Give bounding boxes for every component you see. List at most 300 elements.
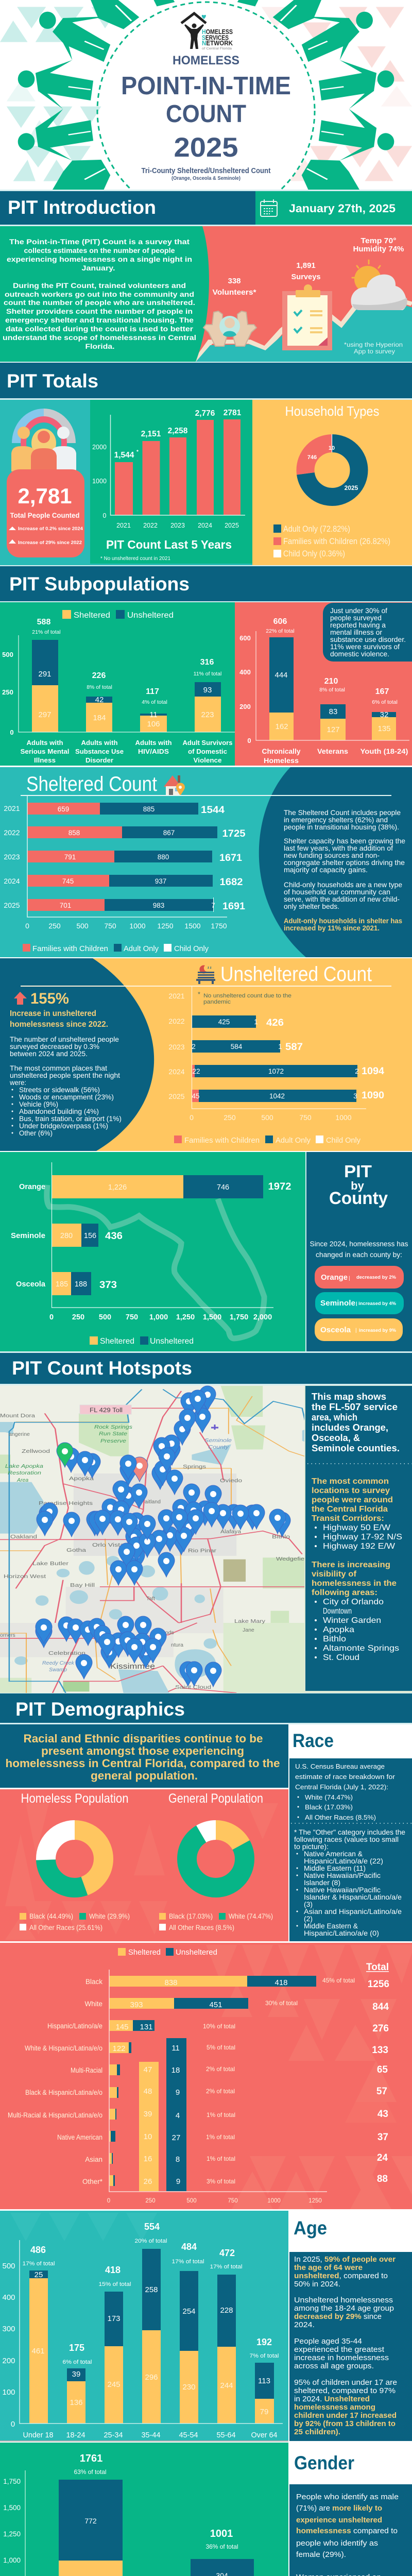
section bar: PIT Subpopulations (0, 565, 412, 601)
value labels: 418 (274, 1978, 288, 1987)
intro text (310, 1240, 408, 1259)
panel: age notes: In 2025, 59% of people over (294, 2255, 396, 2264)
map labels: Taft (146, 1596, 155, 1602)
stat: weather (353, 237, 404, 253)
axis labels: 500 (2, 651, 13, 658)
stacked bar chart: 250 (48, 922, 61, 930)
intro text: count the number of people who are unsheltered. (4, 298, 195, 307)
value labels: 280 (60, 1232, 73, 1240)
category labels: Hispanic/Latino/a/e (47, 2022, 102, 2030)
legend (118, 1948, 217, 1957)
card: total people: Total People Counted (10, 512, 79, 519)
unsheltered text: Vehicle (9%) (19, 1100, 58, 1108)
transit corridors: The most common (312, 1477, 389, 1486)
percent labels (32, 629, 221, 705)
value labels (38, 670, 214, 728)
axis labels: 2023 (170, 522, 185, 529)
value labels: 838 (164, 1978, 178, 1987)
stacked bar chart: 2023 (4, 853, 20, 861)
pill: Osceola (315, 1318, 403, 1341)
percent labels: 3% of total (207, 2178, 235, 2185)
legend (273, 524, 390, 558)
totals: 88 (377, 2174, 388, 2184)
title: (Orange, Osceola & Seminole) (171, 175, 241, 181)
value labels (31, 2270, 270, 2416)
florida outline (47, 1185, 264, 1338)
map labels: Gotha (66, 1547, 86, 1553)
unsheltered text: unsheltered people spent the night (10, 1071, 120, 1079)
intro text: Florida. (85, 342, 114, 350)
stacked bar chart: 983 (153, 902, 164, 909)
stacked bars (269, 637, 396, 719)
axis labels: 1250 (308, 2198, 322, 2204)
panel: age notes: 95% of children under 17 are (294, 2378, 397, 2387)
totals: 1256 (368, 1979, 389, 1990)
sheltered text: Child-only households are a new type (284, 880, 402, 889)
map labels: Rock Springs (94, 1424, 133, 1430)
transit corridors: Highway 17-92 N/S (323, 1533, 402, 1541)
category labels: Violence (194, 756, 221, 764)
axis labels: 0 (10, 728, 14, 736)
axis labels: 2000 (92, 444, 107, 451)
totals: 133 (372, 2045, 388, 2056)
legend (90, 1336, 194, 1346)
legend (62, 610, 174, 620)
axis labels: 1,500 (3, 2504, 21, 2512)
percent labels: 22% of total (266, 628, 295, 634)
section bar: PIT Count Hotspots: PIT Count Hotspots (12, 1358, 192, 1379)
percent labels: 17% of total (172, 2259, 204, 2265)
map labels: Restoration (8, 1470, 41, 1476)
legend (23, 944, 209, 953)
heading: Race: Race (293, 1730, 334, 1751)
category labels: Adult Survivors (182, 739, 233, 747)
axis labels: 1000 (92, 478, 107, 485)
section bar: PIT Introduction: PIT Introduction (8, 197, 156, 218)
value labels: 42 (95, 696, 104, 704)
donut: general population (187, 1830, 245, 1888)
stacked bar chart: 750 (104, 922, 116, 930)
logo: SERVICES (202, 34, 229, 41)
map labels: FL 429 Toll (90, 1408, 123, 1414)
heading: Age: Age (294, 2217, 327, 2239)
totals: 844 (372, 2002, 389, 2012)
stacked bar chart: 1000 (335, 1113, 352, 1122)
title: HOMELESS (173, 54, 239, 67)
unsheltered text: surveyed decreased by 0.3% (10, 1042, 99, 1050)
155% stat (10, 990, 108, 1029)
transit corridors: the Central Florida (312, 1505, 388, 1514)
legend: Sheltered (128, 1948, 161, 1957)
axis labels: 250 (145, 2198, 156, 2204)
axis labels: 1,250 (3, 2530, 21, 2538)
value labels: 254 (182, 2307, 196, 2316)
pin: green (57, 1443, 73, 1467)
percent labels: 1% of total (207, 2155, 235, 2162)
stat: weather: Temp 70° (360, 237, 397, 245)
sheltered text: new funding sources and non- (284, 851, 380, 859)
value labels: 127 (327, 725, 340, 734)
legend: general: White (74.47%) (229, 1912, 273, 1920)
total heading: Total (366, 1962, 389, 1973)
bar labels: * (136, 449, 139, 455)
section bar: PIT Totals (0, 363, 412, 398)
axis labels: 1,000 (3, 2556, 21, 2564)
stat: volunteers: Volunteers* (212, 288, 256, 297)
panel: PIT by county summary (305, 1152, 412, 1351)
value labels: 156 (84, 1232, 96, 1240)
intro text: January. (81, 264, 115, 272)
stacked bar chart: 2021 (4, 804, 20, 812)
stacked bar chart: 1000 (129, 922, 146, 930)
totals: 226 (92, 671, 106, 680)
visibility areas: Apopka (323, 1625, 354, 1634)
stacked bar chart: 1725 (222, 828, 246, 839)
percent labels: 17% of total (23, 2261, 55, 2267)
category labels: Adults with (27, 739, 63, 747)
map labels: Run State (99, 1431, 127, 1437)
category labels: Other* (82, 2178, 103, 2185)
percent labels: 5% of total (207, 2044, 235, 2051)
map labels: Zellwood (22, 1448, 50, 1454)
intro text: The Point-in-Time (PIT) Count is a survey that (9, 238, 190, 246)
donut: homeless population (46, 1830, 104, 1888)
callout: Just under 30% of (330, 606, 387, 615)
category labels: White (84, 2000, 102, 2008)
pill: Orange: decreased by 2% (356, 1275, 397, 1280)
logo: NETWORK (202, 40, 233, 47)
legend: Adult Only (72.82%) (283, 524, 350, 534)
intro text: During the PIT Count, trained volunteers and (13, 281, 186, 290)
icon: calendar (261, 199, 277, 216)
map labels: Oviedo (220, 1478, 242, 1484)
county labels: Orange (19, 1183, 45, 1191)
stacked bar chart: 2022 (4, 828, 20, 837)
stacked bar chart: 584 (231, 1043, 243, 1050)
stacked bar chart: 745 (62, 877, 74, 885)
category labels: Asian (85, 2156, 102, 2163)
footnote: *using the Hyperion (344, 342, 403, 348)
visibility areas: homelessness in the (312, 1579, 397, 1588)
lead text: Seminole counties. (312, 1443, 400, 1453)
logo (181, 13, 233, 50)
people circle: right half (237, 0, 394, 190)
category labels: White & Hispanic/Latina/e/o (25, 2044, 102, 2052)
panel: race notes: Hispanic/Latino/a/e (0) (304, 1929, 379, 1937)
map: FL-507 hotspots (0, 1385, 307, 1693)
axis labels: 2,000 (253, 1313, 272, 1321)
value labels: 79 (260, 2408, 268, 2416)
background triangles: teal (0, 7, 119, 181)
axis labels: 200 (239, 703, 251, 710)
panel: race notes: * The "Other" category includes the (294, 1828, 405, 1836)
unsheltered text: Other (6%) (19, 1129, 53, 1137)
card: total people: Increase of 29% since 2022 (18, 540, 82, 546)
panel: gender notes: homelessness compared to (296, 2527, 398, 2535)
intro text (3, 238, 196, 350)
map labels: Reedy Creek (42, 1660, 75, 1666)
bar labels (114, 409, 242, 460)
pill: Osceola: Osceola (320, 1326, 351, 1334)
value labels: 244 (220, 2381, 233, 2390)
unsheltered text: Streets or sidewalk (56%) (19, 1086, 100, 1094)
totals: 1001 (210, 2528, 233, 2539)
panel: gender notes: (71%) are more likely to (296, 2504, 382, 2513)
percent labels (203, 1977, 355, 2185)
panel: age notes: across all age groups. (294, 2362, 374, 2370)
panel: PIT count last 5 years chart (90, 400, 252, 564)
totals (30, 2222, 272, 2353)
axis labels (107, 2198, 322, 2204)
percent labels (74, 2468, 238, 2550)
totals: 373 (99, 1280, 117, 1291)
callout (323, 603, 412, 662)
totals: 175 (69, 2343, 84, 2353)
panel: age notes: experienced the greatest (294, 2345, 385, 2354)
category labels: Youth (18-24) (360, 748, 408, 755)
category labels: Disorder (85, 756, 113, 764)
callout: mental illness or (330, 628, 382, 636)
totals: 65 (377, 2064, 388, 2075)
sheltered text: Shelter capacity has been growing the (284, 837, 405, 845)
category labels: Substance Use (75, 748, 124, 755)
stacked bar chart: 1682 (219, 877, 243, 888)
bars (109, 1976, 247, 2186)
value labels: 245 (107, 2380, 121, 2389)
map labels: Mount Dora (0, 1413, 35, 1419)
stacked bars (32, 640, 221, 716)
percent labels: 15% of total (99, 2281, 131, 2287)
donut chart (305, 434, 359, 497)
totals: 436 (105, 1231, 123, 1242)
panel: chronic, veterans, youth (235, 602, 412, 766)
visibility areas: There is increasing (312, 1561, 390, 1569)
heading (329, 1162, 388, 1208)
axis labels: 0 (103, 512, 107, 519)
percent labels: 17% of total (210, 2264, 242, 2270)
panel: race notes: Islander & Hispanic/Latino/a/e (304, 1893, 402, 1901)
panel: age notes: in 2024. Unsheltered (294, 2395, 370, 2403)
stacked bar chart: 7 (211, 902, 215, 909)
percent labels: 1% of total (206, 2133, 235, 2141)
panel: age notes: homelessness among (294, 2403, 375, 2412)
map labels: Celebration (48, 1650, 85, 1656)
stacked bar chart: 2021 (168, 992, 185, 1000)
percent labels: 10% of total (203, 2023, 235, 2030)
percent labels: 36% of total (206, 2543, 238, 2550)
headings (21, 1791, 263, 1806)
axis labels: 0 (11, 2420, 15, 2429)
map labels: angerine (9, 1431, 30, 1437)
bar labels: 2,258 (168, 427, 188, 435)
category labels: Black & Hispanic/Latina/e/o (25, 2089, 102, 2096)
icon: hands (203, 311, 256, 346)
county labels: Seminole (11, 1232, 45, 1240)
map labels: Swamp (49, 1667, 67, 1673)
value labels: 258 (145, 2285, 158, 2294)
panel: household types (252, 400, 412, 565)
percent labels: 2% of total (206, 2088, 235, 2095)
axis labels: 500 (186, 2198, 197, 2204)
illustration: people and rainbow (11, 409, 76, 471)
panel: unsheltered count (0, 958, 412, 1151)
pin: red (131, 1457, 148, 1482)
sheltered text: congregate shelter options driving the (284, 858, 405, 867)
panel: race notes: Central Florida (July 1, 2022): (295, 1783, 388, 1791)
stacked bar chart: 885 (143, 805, 154, 813)
map base (0, 1386, 307, 1633)
stacked bar chart: 2025 (4, 901, 20, 909)
axis labels: 500 (99, 1313, 111, 1321)
title: POINT-IN-TIME (121, 72, 291, 100)
transit corridors: locations to survey (312, 1486, 390, 1495)
sheltered text: The Sheltered Count includes people (284, 808, 401, 817)
category labels: Adults with (135, 739, 172, 747)
axis labels: 1,250 (176, 1313, 195, 1321)
panel: age notes: unsheltered, compared to (294, 2272, 388, 2280)
heading: Sheltered Count (26, 773, 157, 795)
stat: surveys (291, 261, 320, 281)
stacked bar chart: 1 (254, 1018, 258, 1026)
section bar: PIT Demographics: PIT Demographics (15, 1699, 185, 1720)
lead text: area, which (312, 1412, 357, 1422)
section bar: PIT Demographics (0, 1693, 412, 1724)
map labels: Jane (243, 1627, 254, 1633)
stat: volunteers: 338 (228, 277, 241, 285)
axis labels (2, 651, 14, 736)
map labels: oods (162, 1630, 174, 1636)
stacked bar chart: 1090 (362, 1090, 384, 1101)
stacked bar chart: 0 (25, 922, 29, 930)
panel: hotspots text (304, 1385, 412, 1693)
axis labels (49, 1313, 272, 1321)
stacked bar chart: 1072 (268, 1067, 284, 1075)
donut chart: 2025 (345, 484, 358, 492)
totals: 276 (372, 2023, 389, 2034)
footnote: * No unsheltered count in 2021 (100, 556, 170, 562)
axis labels: 1,500 (203, 1313, 221, 1321)
bars (52, 1175, 183, 1295)
panel: race notes: Hispanic/Latino/a/e (22) (304, 1857, 383, 1865)
category labels: HIV/AIDS (138, 748, 169, 755)
panel: total count (0, 400, 90, 565)
category labels (21, 739, 233, 764)
axis labels: 250 (72, 1313, 84, 1321)
category labels: 35-44 (141, 2431, 161, 2439)
totals: 484 (181, 2242, 197, 2252)
callout: 11% were survivors of (330, 642, 400, 651)
panel: gender chart (0, 2443, 288, 2576)
stacked bar chart: 2023 (168, 1043, 185, 1051)
sheltered text: serve, with the addition of new child- (284, 895, 400, 903)
section bar: PIT Subpopulations: PIT Subpopulations (9, 573, 190, 595)
pill: Seminole (315, 1292, 404, 1314)
value labels: 296 (145, 2373, 158, 2382)
stacked bar chart: 791 (64, 853, 76, 861)
visibility areas: Winter Garden (323, 1616, 381, 1625)
panel: racial disparities headline: present amongst those experiencing (41, 1744, 244, 1757)
heading: County (329, 1189, 388, 1208)
map labels: Kissimmee (110, 1662, 155, 1671)
transit corridors: people were around (312, 1496, 393, 1504)
totals: 37 (377, 2132, 388, 2143)
category labels: Serious Mental (21, 748, 69, 755)
unsheltered text: Abandoned building (4%) (19, 1107, 99, 1115)
panel: age notes: 2024. (294, 2320, 315, 2329)
percent labels: 20% of total (135, 2238, 167, 2244)
value labels: 393 (130, 2001, 143, 2009)
dashed circle (97, 1, 315, 190)
panel: race notes: (3) (304, 1900, 313, 1908)
panel: race notes: Middle Eastern (11) (304, 1864, 366, 1872)
axis labels: 600 (239, 634, 251, 642)
stacked bar chart (4, 795, 246, 930)
percent labels: 8% of total (87, 684, 112, 690)
card: total people (7, 469, 84, 557)
totals (37, 618, 214, 696)
value labels: 185 (56, 1280, 68, 1289)
value labels (274, 671, 391, 734)
note: no count in 2021: * (198, 990, 200, 998)
panel: age notes: by 92% (from 13 children to (294, 2419, 396, 2428)
bar labels: 2,151 (141, 430, 161, 438)
panel: race notes: (2) (304, 1914, 313, 1923)
county labels (11, 1183, 46, 1289)
value labels: 27 (172, 2133, 180, 2142)
stacked bar chart: 425 (218, 1018, 230, 1026)
value labels: 444 (274, 671, 288, 680)
panel: race notes: Asian and Hispanic/Latino/a/e (304, 1907, 402, 1916)
axis labels: 2025 (225, 522, 239, 529)
panel: race notes: Middle Eastern & (304, 1922, 358, 1930)
logo: HOMELESS (202, 28, 233, 36)
stat: weather: Humidity 74% (353, 245, 404, 253)
percent labels: 45% of total (322, 1977, 355, 1984)
percent labels: 21% of total (32, 629, 61, 635)
visibility areas: Altamonte Springs (323, 1644, 399, 1653)
stacked bar chart: 867 (163, 829, 175, 837)
card: total people: Increase of 0.2% since 2024 (18, 526, 83, 532)
percent labels: 63% of total (74, 2468, 106, 2476)
panel: age notes: among the 18-24 age group (294, 2304, 394, 2313)
title: Tri-County Sheltered/Unsheltered Count (141, 167, 271, 175)
pill: Seminole: | increased by 4% (356, 1301, 397, 1307)
intro text: changed in each county by: (316, 1251, 402, 1259)
legend: general: Black (17.03%) (169, 1912, 213, 1920)
totals: 43 (377, 2109, 388, 2120)
value labels: 136 (70, 2398, 83, 2407)
legend (174, 1136, 360, 1145)
map labels: Horizon West (4, 1573, 46, 1580)
category labels: Chronically (262, 748, 301, 755)
totals (368, 1979, 389, 2184)
percent labels: 1% of total (207, 2111, 235, 2119)
stacked bars (59, 2480, 254, 2576)
pill: Osceola: | (355, 1328, 357, 1333)
category labels (23, 2431, 277, 2439)
lead text: Osceola, & (312, 1433, 360, 1443)
intro text: experiencing homelessness on a single night in (7, 255, 192, 263)
stacked bar chart: 858 (68, 829, 80, 837)
value labels: 131 (140, 2023, 153, 2031)
legend: Sheltered (100, 1337, 134, 1346)
pins: background cluster (36, 1386, 290, 1686)
section bar: PIT Introduction (0, 190, 412, 226)
value labels: 16 (144, 2155, 152, 2163)
map labels: County (208, 1444, 229, 1450)
axis labels: 250 (2, 688, 13, 696)
note: no count in 2021 (198, 990, 291, 1005)
